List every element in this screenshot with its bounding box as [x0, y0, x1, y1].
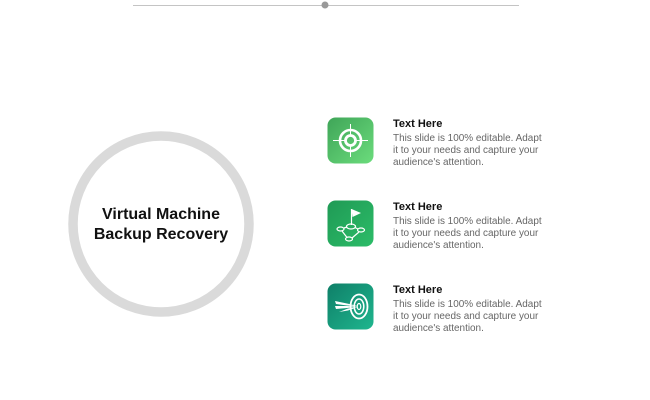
text block 2: This slide is 100% editable. Adapt [393, 216, 542, 227]
main circle ring [68, 131, 254, 317]
text block 3 [393, 284, 542, 334]
text block 3: Text Here [393, 284, 442, 296]
icon: arrows hitting target [328, 284, 374, 330]
central title: Virtual Machine [102, 206, 220, 223]
text block 1: Text Here [393, 118, 442, 130]
top slider line [133, 2, 519, 8]
text block 3: it to your needs and capture your [393, 311, 538, 322]
text block 1: it to your needs and capture your [393, 145, 538, 156]
text block 3: This slide is 100% editable. Adapt [393, 299, 542, 310]
text block 3: audience's attention. [393, 323, 484, 334]
icon: crosshair target [328, 118, 374, 164]
central title [94, 206, 228, 243]
icon: flag on path [328, 200, 374, 246]
text block 2: audience's attention. [393, 240, 484, 251]
text block 1: audience's attention. [393, 157, 484, 168]
text block 2 [393, 201, 542, 251]
central title: Backup Recovery [94, 226, 228, 243]
text block 2: it to your needs and capture your [393, 228, 538, 239]
text block 1 [393, 118, 542, 168]
text block 1: This slide is 100% editable. Adapt [393, 133, 542, 144]
text block 2: Text Here [393, 201, 442, 213]
